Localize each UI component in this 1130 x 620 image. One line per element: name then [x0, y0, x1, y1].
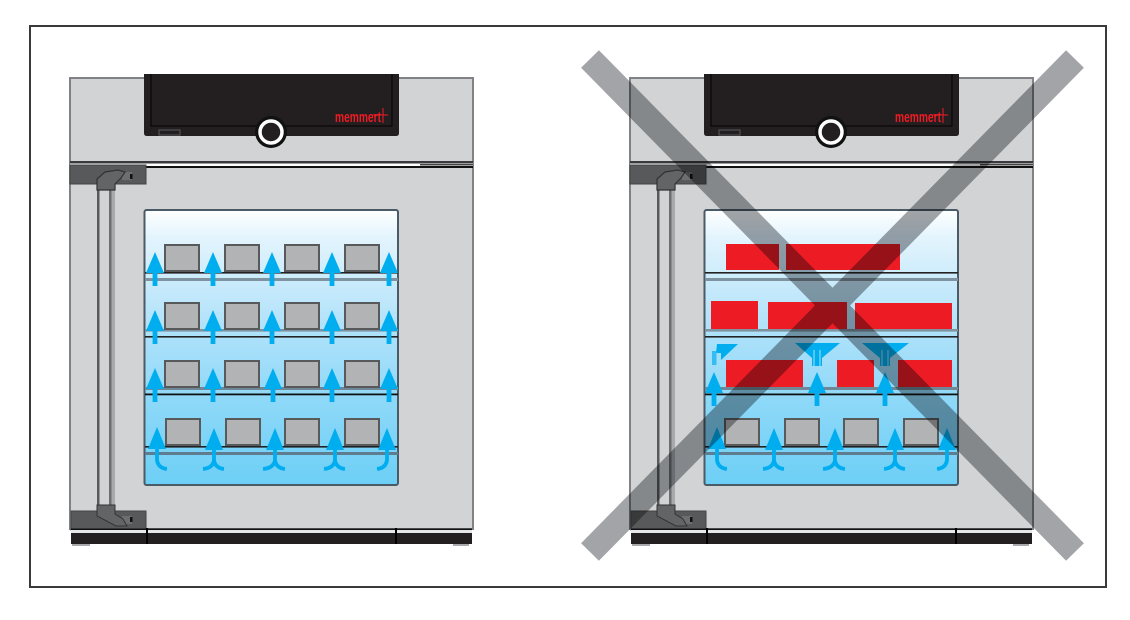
oversized red trays [711, 244, 952, 387]
oven body [630, 74, 1033, 546]
sample trays [165, 245, 379, 445]
blocked airflow arrows [705, 343, 956, 469]
brand logo: memmert [895, 109, 941, 126]
shelves [145, 272, 398, 455]
panel: incorrect loading oven [590, 59, 1075, 552]
panel: correct loading oven [70, 74, 473, 546]
oven body [70, 74, 473, 546]
brand logo: memmert [335, 109, 381, 126]
airflow arrows [146, 252, 398, 469]
grey trays on bottom shelf [725, 419, 938, 445]
shelves [705, 272, 958, 455]
warning cross [590, 59, 1075, 552]
